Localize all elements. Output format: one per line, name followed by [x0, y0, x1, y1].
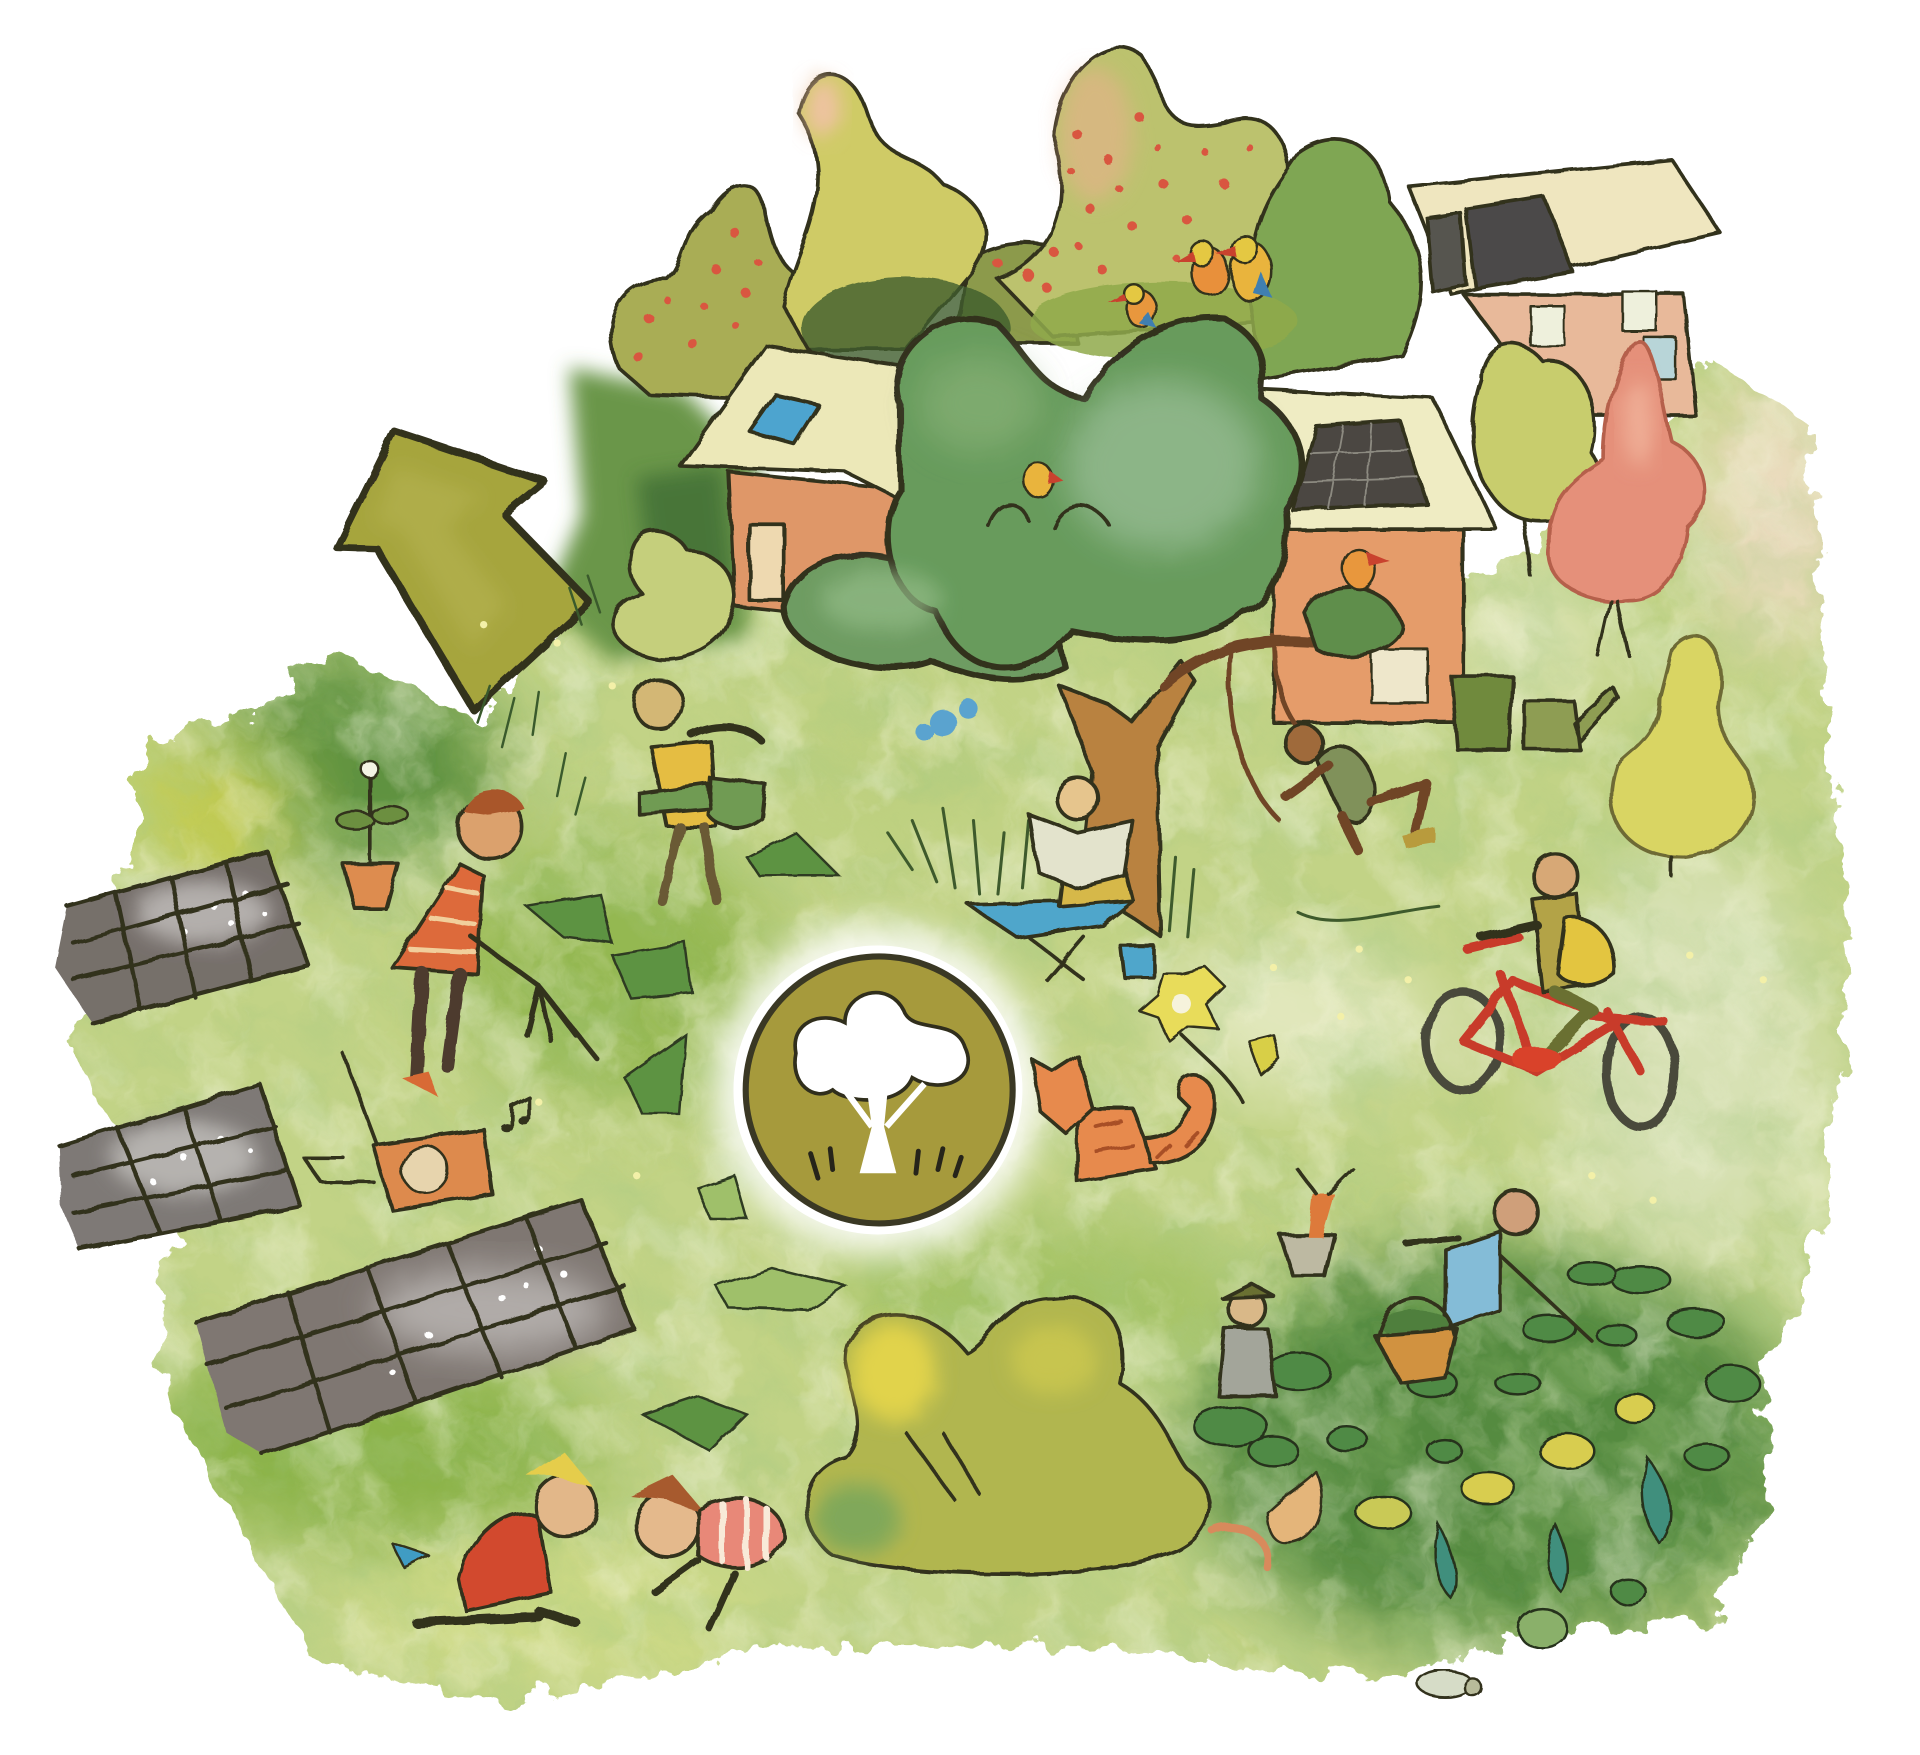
canopy — [888, 318, 1301, 668]
trunk — [1059, 661, 1194, 937]
tree: pink — [1547, 341, 1704, 601]
icon: white tree — [795, 993, 968, 1173]
vegetable bed plants — [1194, 1263, 1760, 1648]
person: raking with orange stripes — [392, 789, 598, 1097]
birds — [1024, 235, 1402, 657]
arrow: olive up-left arrow — [337, 431, 590, 710]
bush: small beside left house — [613, 530, 735, 659]
house: left — [680, 345, 931, 625]
solar panel: middle left — [59, 1084, 300, 1249]
bush: speckled pink tree — [998, 48, 1298, 337]
tree: yellow bush — [1611, 636, 1753, 857]
bush: green right — [1249, 140, 1422, 380]
child: striped shirt — [392, 1476, 784, 1629]
bird: middle — [1176, 241, 1228, 295]
hedge: dark greenery behind left house — [545, 368, 759, 661]
person: gardener with hat — [1218, 1283, 1276, 1396]
cat — [1032, 1056, 1215, 1182]
mug — [1120, 945, 1153, 977]
person: gardener with basket — [1374, 1190, 1592, 1384]
child: red jacket — [416, 1451, 596, 1623]
lawn speckles — [480, 621, 1767, 1253]
bird: on canopy left — [1108, 284, 1157, 328]
tree: central oak — [784, 318, 1322, 937]
bird: right — [1217, 235, 1273, 301]
radio with music notes — [304, 1053, 530, 1210]
watering can — [1524, 688, 1619, 750]
toy: doll — [392, 1543, 429, 1568]
carrot bucket — [1280, 1170, 1353, 1276]
icon: central tree badge — [713, 925, 1043, 1255]
scattered leaves — [527, 833, 845, 1451]
person: reading in chair — [967, 778, 1153, 980]
person: watering — [634, 680, 765, 900]
house: right with solar roof — [1249, 390, 1496, 723]
ground: watercolor lawn — [66, 360, 1852, 1711]
bird and worm — [1212, 1472, 1322, 1568]
speckles: red dots on bushes — [632, 112, 1253, 360]
bird: in canopy — [1024, 463, 1063, 497]
person: swinging on rope — [1229, 637, 1435, 851]
small trees right — [1473, 341, 1753, 876]
person: cyclist — [1427, 854, 1675, 1127]
bush: yellow tall — [784, 74, 985, 349]
bush: red speckled left — [611, 185, 838, 398]
lower bush — [784, 554, 1065, 680]
solar panel: lower — [196, 1200, 634, 1455]
lower central yellow bush — [806, 1297, 1209, 1574]
grass: tuft under tree — [888, 808, 1439, 937]
rain barrel and watering can — [1451, 676, 1619, 750]
bird: on swing branch — [1304, 550, 1402, 657]
solar panel: upper left — [55, 851, 309, 1023]
barrel — [1451, 676, 1512, 750]
flowers: yellow near cat — [916, 698, 1280, 1102]
back bushes — [611, 48, 1422, 398]
tree: yellow green — [1473, 344, 1600, 521]
flower pot plant — [337, 761, 408, 909]
grass: tufts below arrow — [478, 576, 600, 814]
house: upper right — [1408, 159, 1720, 416]
bush: red speckled filler behind canopy — [955, 243, 1078, 343]
flower: blue — [929, 709, 956, 736]
small bee at bottom right — [1418, 1670, 1482, 1697]
